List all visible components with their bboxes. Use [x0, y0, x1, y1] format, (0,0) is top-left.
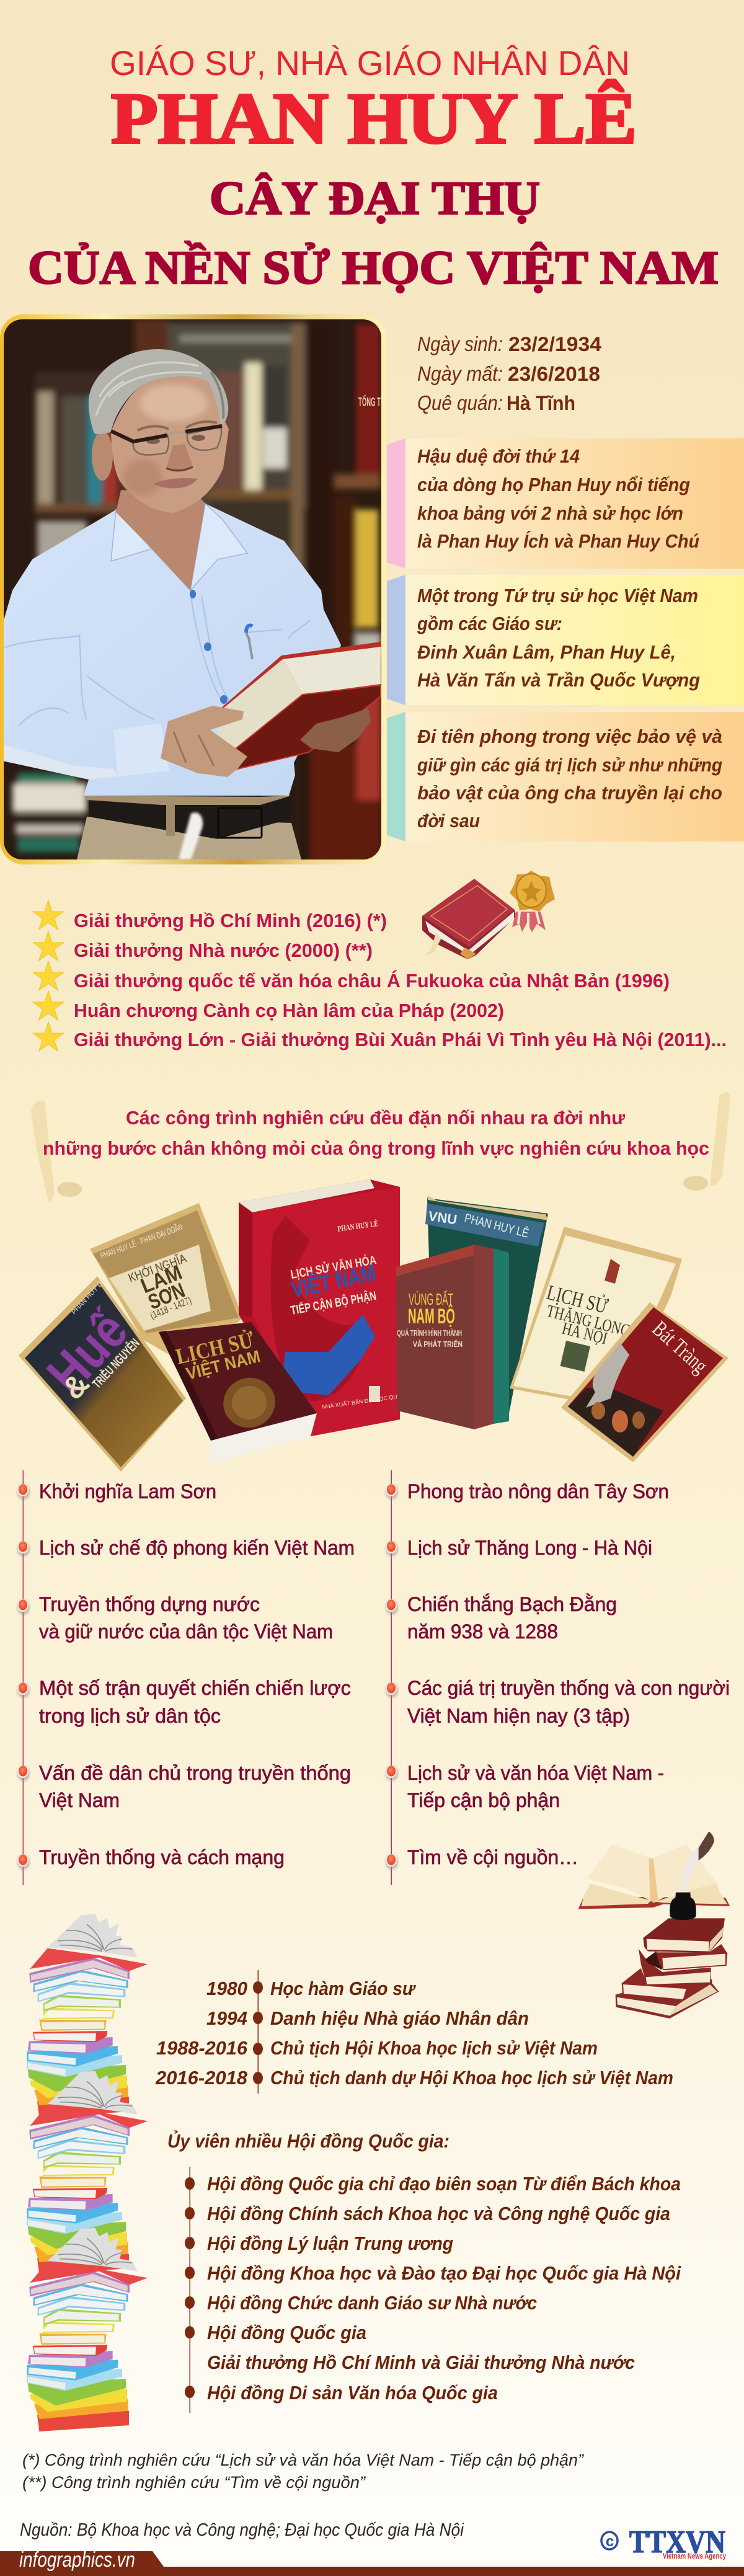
timeline: 1988-2016: [156, 2037, 248, 2059]
works list: right column: Các giá trị truyền thống và con người: [407, 1677, 730, 1699]
book: Việt Nam tiếp cận bộ phận: [239, 1179, 437, 1436]
eyes, nose, mouth: [138, 422, 217, 489]
works list: right column: Lịch sử và văn hóa Việt Nam -: [407, 1762, 664, 1784]
timeline: Chủ tịch danh dự Hội Khoa học lịch sử Việt Nam: [270, 2067, 673, 2089]
book: Bát Tràng: [561, 1302, 728, 1462]
icon: star: [33, 900, 64, 1051]
panel: descendant: Hậu duệ đời thứ 14: [417, 445, 580, 467]
timeline: 1994: [206, 2007, 247, 2029]
timeline: 1980: [206, 1978, 247, 1999]
book: Vùng đất Nam Bộ slipcase: VÀ PHÁT TRIỂN: [413, 1339, 463, 1349]
timeline: [155, 1970, 673, 2094]
book: Khởi nghĩa Lam Sơn: [90, 1203, 243, 1364]
book: Việt Nam tiếp cận bộ phận: VIỆT NAM: [289, 1259, 378, 1304]
list: national councils: Hội đồng Khoa học và Đào tạo Đại học Quốc gia Hà Nội: [207, 2262, 681, 2284]
book: Lịch sử Việt Nam: [159, 1322, 317, 1464]
works list: left column: Khởi nghĩa Lam Sơn: [39, 1480, 216, 1503]
info: birth, death, hometown: Hà Tĩnh: [507, 392, 575, 414]
info: birth, death, hometown: 23/2/1934: [508, 333, 601, 355]
panel: descendant: là Phan Huy Ích và Phan Huy Chú: [417, 530, 699, 552]
logo: TTXVN: TTXVN: [629, 2525, 725, 2560]
book: Bát Tràng: Bát Tràng: [648, 1316, 712, 1378]
list: national councils: Hội đồng Quốc gia: [207, 2322, 366, 2343]
book: Lịch sử Thăng Long Hà Nội: [510, 1227, 682, 1408]
book: Huế và triều Nguyễn: Huế: [35, 1299, 140, 1405]
footer bar: [0, 2548, 744, 2576]
icon: bullets: [17, 1484, 30, 1870]
book: Khởi nghĩa Lam Sơn: (1418 - 1427): [149, 1295, 193, 1321]
icon: timeline dots: [253, 1981, 263, 2084]
works list: left column: [17, 1470, 355, 1885]
logo: TTXVN: [601, 2525, 727, 2560]
buttons and pen: [190, 590, 252, 704]
works list: right column: Phong trào nông dân Tây Sơn: [407, 1480, 669, 1503]
scroll banner: những bước chân không mỏi của ông trong lĩnh vực nghiên cứu khoa học: [43, 1137, 709, 1159]
book: Việt Nam tiếp cận bộ phận: TIẾP CẬN BỘ PHẬN: [290, 1288, 378, 1318]
panel: four pillars: gồm các Giáo sư:: [417, 613, 562, 634]
awards list: Giải thưởng Nhà nước (2000) (**): [74, 939, 373, 961]
panel: four pillars: Đinh Xuân Lâm, Phan Huy Lê,: [417, 641, 676, 663]
book: Huế và triều Nguyễn: PHAN HUY LÊ: [70, 1277, 107, 1316]
book: Huế và triều Nguyễn: &: [55, 1366, 96, 1406]
list: national councils: Hội đồng Di sản Văn hóa Quốc gia: [207, 2382, 498, 2404]
book: Huế và triều Nguyễn: [19, 1276, 186, 1472]
footnotes: (*) Công trình nghiên cứu “Lịch sử và văn hóa Việt Nam - Tiếp cận bộ phận”: [22, 2451, 584, 2469]
belt: [89, 796, 291, 839]
works list: left column: Truyền thống và cách mạng: [39, 1846, 285, 1868]
icon: bullets: [386, 1484, 398, 1870]
info: birth, death, hometown: [417, 332, 601, 414]
heading: national councils: Ủy viên nhiều Hội đồng Quốc gia:: [167, 2130, 450, 2152]
panel: four pillars: Một trong Tứ trụ sử học Việt Nam: [417, 585, 698, 606]
panel: four pillars: [387, 575, 744, 705]
right hand: [300, 708, 371, 752]
info: birth, death, hometown: Ngày mất:: [417, 362, 503, 385]
book: Việt Nam tiếp cận bộ phận: NHÀ XUẤT BẢN ĐẠI HỌC QUỐC GIA HÀ NỘI: [322, 1387, 437, 1410]
book: Lịch sử Thăng Long Hà Nội: THĂNG LONG: [544, 1302, 632, 1341]
list: national councils: Giải thưởng Hồ Chí Minh và Giải thưởng Nhà nước: [207, 2352, 635, 2373]
shirt: [2, 504, 341, 796]
awards list: Giải thưởng Hồ Chí Minh (2016) (*): [74, 910, 387, 931]
book: green volume: [425, 1196, 548, 1420]
works list: left column: và giữ nước của dân tộc Việt Nam: [39, 1620, 333, 1643]
info: birth, death, hometown: Quê quán:: [417, 391, 503, 414]
book: Vùng đất Nam Bộ slipcase: [396, 1245, 509, 1429]
list: national councils: Hội đồng Lý luận Trung ương: [207, 2232, 453, 2254]
list: national councils: [185, 2167, 681, 2413]
book: Lịch sử Việt Nam: VIỆT NAM: [184, 1346, 262, 1383]
panel: descendant: [387, 438, 744, 569]
book: green volume: VNU: [427, 1208, 458, 1227]
book: Vùng đất Nam Bộ slipcase: NAM BỘ: [408, 1304, 455, 1328]
works list: right column: Lịch sử Thăng Long - Hà Nội: [407, 1537, 652, 1559]
works list: left column: Truyền thống dựng nước: [39, 1593, 260, 1615]
portrait photo with gold frame: TỔNG T: [358, 394, 381, 409]
panel: pioneer: đời sau: [417, 810, 480, 832]
footnotes: (**) Công trình nghiên cứu “Tìm về cội nguồn”: [22, 2473, 366, 2492]
subtitle: profession: GIÁO SƯ, NHÀ GIÁO NHÂN DÂN: [110, 43, 630, 82]
panel: pioneer: Đi tiên phong trong việc bảo vệ và: [417, 726, 722, 747]
title line: của nền sử học: CỦA NỀN SỬ HỌC VIỆT NAM: [28, 241, 719, 294]
works list: left column: Vấn đề dân chủ trong truyền thống: [39, 1762, 351, 1784]
book: Huế và triều Nguyễn: TRIỀU NGUYỄN: [90, 1336, 143, 1391]
panel: descendant: khoa bảng với 2 nhà sử học lớn: [417, 502, 683, 524]
list: national councils: Hội đồng Chính sách Khoa học và Công nghệ Quốc gia: [207, 2203, 670, 2224]
panel: pioneer: [387, 712, 744, 842]
icon: award book and medal: [422, 871, 555, 959]
list: national councils: Hội đồng Quốc gia chỉ đạo biên soạn Từ điển Bách khoa: [207, 2173, 681, 2195]
awards list: [33, 900, 727, 1051]
panel: descendant: của dòng họ Phan Huy nổi tiếng: [417, 474, 690, 495]
awards list: Huân chương Cành cọ Hàn lâm của Pháp (2002): [74, 1000, 504, 1021]
glasses: [111, 426, 222, 455]
works list: right column: Việt Nam hiện nay (3 tập): [407, 1705, 630, 1727]
timeline: Học hàm Giáo sư: [270, 1978, 417, 1999]
footer bar: infographics.vn: [19, 2548, 135, 2572]
face: [111, 376, 229, 513]
panel: pioneer: giữ gìn các giá trị lịch sử như những: [417, 754, 722, 776]
book: Lịch sử Thăng Long Hà Nội: HÀ NỘI: [560, 1319, 609, 1349]
works list: left column: Lịch sử chế độ phong kiến Việt Nam: [39, 1537, 355, 1559]
hair: [89, 349, 228, 434]
logo: TTXVN: c: [606, 2533, 614, 2550]
icon: list dots: [185, 2177, 195, 2398]
works list: right column: Tìm về cội nguồn…: [407, 1846, 578, 1868]
title: name: PHAN HUY LÊ: [111, 79, 637, 159]
awards list: Giải thưởng quốc tế văn hóa châu Á Fukuoka của Nhật Bản (1996): [74, 970, 670, 992]
book: Khởi nghĩa Lam Sơn: PHAN HUY LÊ - PHAN ĐẠI DOÃN: [99, 1222, 184, 1261]
book: Khởi nghĩa Lam Sơn: LAM: [138, 1261, 185, 1298]
title: [28, 43, 719, 294]
works list: right column: [386, 1470, 730, 1885]
works list: right column: Chiến thắng Bạch Đằng: [407, 1593, 617, 1615]
pen foreground: [179, 812, 203, 859]
icon: open book, quill, ink and red books: [578, 1831, 730, 2019]
footnotes: [22, 2451, 584, 2492]
awards list: Giải thưởng Lớn - Giải thưởng Bùi Xuân Phái Vì Tình yêu Hà Nội (2011)...: [74, 1029, 727, 1050]
timeline: Danh hiệu Nhà giáo Nhân dân: [270, 2007, 529, 2029]
works list: left column: trong lịch sử dân tộc: [39, 1705, 221, 1727]
icon: colourful book stack: [27, 1914, 148, 2432]
book held in hands: [218, 642, 381, 769]
scroll banner: Các công trình nghiên cứu đều đặn nối nhau ra đời như: [126, 1107, 626, 1129]
info: birth, death, hometown: Ngày sinh:: [417, 332, 503, 355]
title line: cây đại thụ: CÂY ĐẠI THỤ: [210, 172, 540, 224]
book: Vùng đất Nam Bộ slipcase: QUÁ TRÌNH HÌNH THÀNH: [397, 1328, 462, 1338]
works list: right column: Tiếp cận bộ phận: [407, 1789, 560, 1811]
trousers: [77, 817, 301, 859]
book: Lịch sử Việt Nam: LỊCH SỬ: [174, 1327, 257, 1369]
list: national councils: Hội đồng Chức danh Giáo sư Nhà nước: [207, 2292, 537, 2314]
portrait photo with gold frame: [0, 314, 386, 864]
works list: left column: Một số trận quyết chiến chiến lược: [39, 1677, 351, 1699]
book: Lịch sử Thăng Long Hà Nội: LỊCH SỬ: [544, 1281, 610, 1318]
panel: four pillars: Hà Văn Tấn và Trần Quốc Vượng: [417, 669, 700, 691]
timeline: 2016-2018: [155, 2067, 248, 2089]
book: Vùng đất Nam Bộ slipcase: VÙNG ĐẤT: [409, 1290, 453, 1308]
info: birth, death, hometown: 23/6/2018: [508, 363, 600, 385]
works list: left column: Việt Nam: [39, 1789, 120, 1811]
book covers collage: [19, 1179, 728, 1472]
works list: right column: năm 938 và 1288: [407, 1620, 558, 1643]
book: green volume: PHAN HUY LÊ: [463, 1211, 530, 1240]
ear: [92, 431, 113, 481]
neck: [116, 490, 205, 590]
left hand: [161, 706, 247, 777]
book: Khởi nghĩa Lam Sơn: SƠN: [145, 1279, 188, 1314]
scroll banner: [31, 1081, 730, 1211]
collar: [111, 504, 247, 590]
panel: pioneer: bảo vật của ông cha truyền lại cho: [417, 782, 722, 804]
book: Việt Nam tiếp cận bộ phận: LỊCH SỬ VĂN HÓA: [290, 1252, 378, 1282]
timeline: Chủ tịch Hội Khoa học lịch sử Việt Nam: [270, 2037, 598, 2059]
book: Việt Nam tiếp cận bộ phận: PHAN HUY LÊ: [337, 1219, 379, 1233]
source: Nguồn: Bộ Khoa học và Công nghệ; Đại học Quốc gia Hà Nội: [20, 2520, 464, 2540]
book: Khởi nghĩa Lam Sơn: KHỞI NGHĨA: [126, 1250, 188, 1286]
